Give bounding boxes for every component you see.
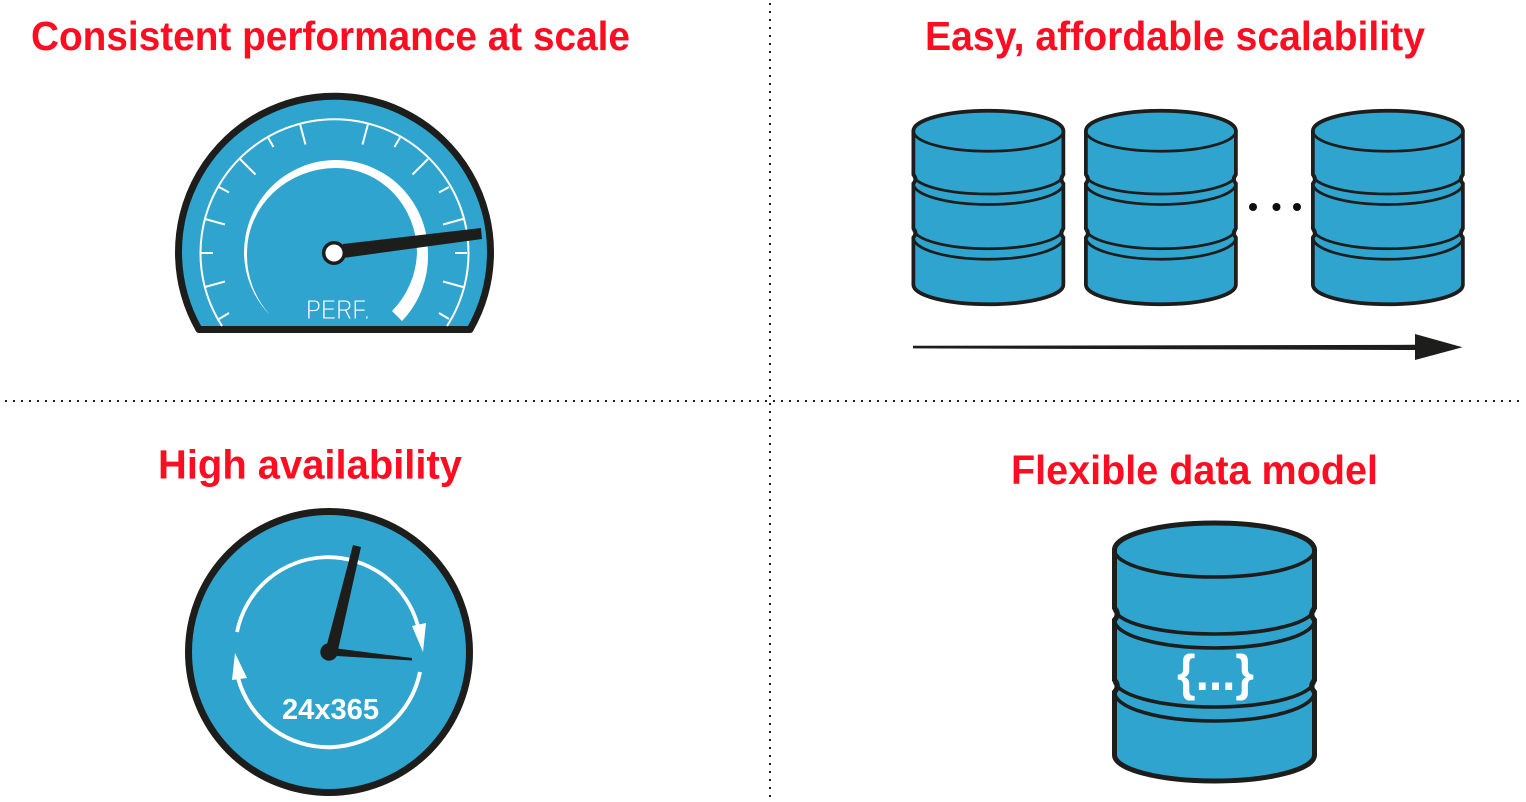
clock label: 24x365 — [282, 694, 379, 726]
icon: 24x365 clock — [188, 512, 470, 792]
icon: database 3 — [1313, 111, 1463, 304]
gauge hub — [324, 243, 344, 263]
icon: performance gauge — [178, 96, 490, 330]
icon: ellipsis dots — [1249, 203, 1301, 211]
icon: database 2 — [1086, 111, 1236, 304]
arrow: horizontal scale-out — [913, 334, 1462, 360]
heading: flexible data model: Flexible data model — [1011, 447, 1378, 493]
heading: consistent performance at scale: Consistent performance at scale — [31, 13, 630, 59]
gauge label: PERF. — [306, 294, 370, 325]
braces label: {...} — [1177, 645, 1254, 701]
clockwise cycle arrows — [232, 557, 426, 747]
clock hands — [320, 545, 412, 661]
heading: high availability: High availability — [158, 442, 462, 488]
icon: database with JSON braces — [1114, 523, 1314, 781]
gauge needle — [343, 228, 482, 258]
icon: database 1 — [913, 111, 1063, 304]
gauge scale ticks — [200, 119, 468, 326]
white performance arc — [244, 160, 428, 321]
heading: easy, affordable scalability: Easy, affordable scalability — [925, 13, 1425, 59]
